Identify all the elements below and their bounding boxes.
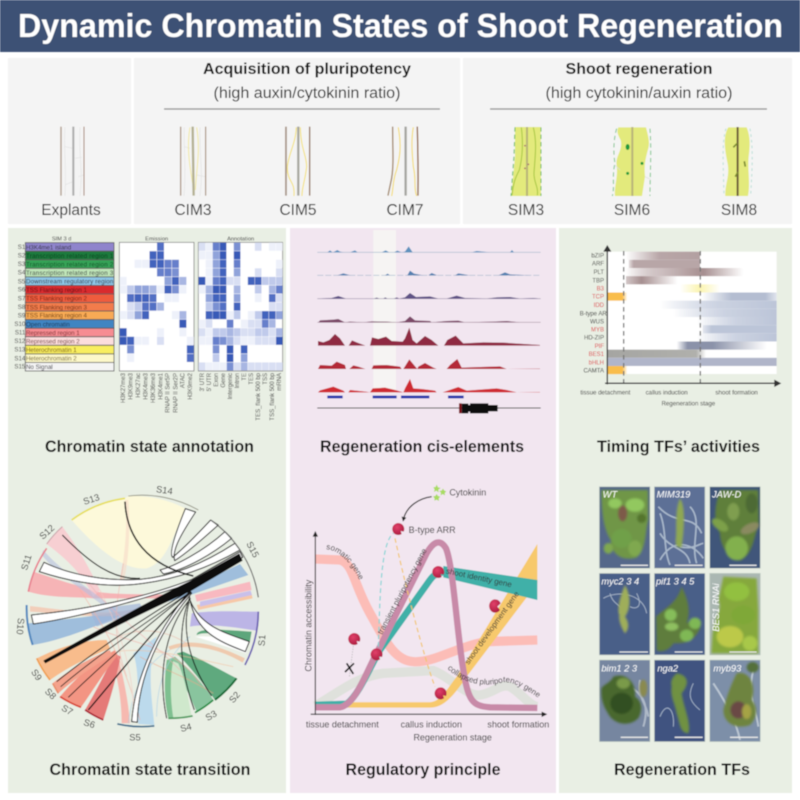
heatmap: annotation: TE	[242, 373, 248, 381]
labels: transcription factors: B-type AR	[580, 311, 607, 317]
labels: transcription factors: B3	[597, 287, 605, 293]
heading: regeneration cis-elements: Regeneration cis-elements	[320, 437, 524, 456]
photo: JAW-D	[710, 487, 761, 568]
chart: regeneration cis-element tracks	[317, 230, 541, 413]
photo: myb93	[710, 660, 760, 742]
labels: state sectors: S15	[244, 540, 261, 559]
labels: state sectors: S5	[129, 732, 141, 742]
heading: chromatin state annotation: Chromatin state annotation	[45, 437, 254, 456]
heatmap: annotation: Gene	[221, 372, 227, 388]
legend: chromatin states: Transcription related region 1	[26, 253, 114, 260]
heatmap: emission: H3K36me3	[151, 372, 157, 403]
curve: shoot development gene	[315, 544, 537, 708]
photo: BES1 RNAi	[710, 573, 760, 655]
heatmap: emission: H3K9me2	[188, 372, 194, 400]
legend: chromatin states: Heterochromatin 2	[26, 356, 77, 363]
heatmap: annotation: 3' UTR	[200, 372, 206, 391]
ribbons: S15 transitions outlined in black	[31, 502, 249, 722]
title banner: Dynamic Chromatin States of Shoot Regeneration	[18, 8, 783, 45]
heatmap: emission	[119, 237, 194, 413]
heatmap: emission: H3K9me3	[128, 372, 134, 400]
legend: chromatin states: S3	[18, 261, 26, 268]
photo: bim1 2 3	[599, 660, 650, 742]
heading: regeneration TFs: Regeneration TFs	[614, 760, 750, 779]
labels: state sectors: S12	[37, 523, 57, 541]
heatmap: annotation: mRNA	[277, 373, 283, 391]
photo: BES1 RNAi: BES1 RNAi	[711, 583, 721, 632]
heatmap: annotation: Intron	[235, 373, 241, 388]
labels: regeneration stages	[580, 389, 758, 407]
panel: regeneration cis-elements and regulatory principle	[290, 228, 556, 793]
labels: regulatory principle: shoot formation	[487, 719, 549, 729]
icon: cytokinin molecules	[433, 485, 446, 501]
subheading: auxin ratio: (high auxin/cytokinin ratio)	[214, 85, 400, 102]
labels: regeneration stages: callus induction	[646, 389, 688, 396]
legend: chromatin states: S8	[18, 304, 26, 311]
legend: chromatin states: Transcription related region 2	[26, 261, 114, 268]
chart: timing of TF activities	[580, 245, 781, 407]
heatmap: annotation: Exon	[214, 373, 220, 387]
heatmap: annotation: TSS	[263, 373, 269, 385]
chart: regulatory principle	[304, 484, 550, 743]
legend: chromatin states: S7	[18, 295, 26, 302]
icon: CIM7 tissue	[388, 127, 418, 196]
labels: transcription factors: ARF	[592, 262, 604, 268]
panel: explants	[8, 58, 131, 224]
label: CIM3: CIM3	[174, 202, 212, 219]
legend: chromatin states: Repressed region 2	[26, 338, 80, 345]
heatmap: annotation: Annotation	[227, 237, 254, 243]
axes	[311, 531, 547, 717]
icon: explant tissue	[61, 127, 84, 196]
title banner	[0, 0, 800, 52]
photo: myb93: myb93	[713, 664, 742, 674]
labels: regulatory principle	[304, 488, 550, 743]
gene model	[317, 403, 541, 413]
legend: chromatin states: S15	[14, 364, 26, 371]
label: CIM7: CIM7	[386, 202, 424, 219]
labels: regulatory principle: shoot development gene	[463, 589, 521, 666]
legend: chromatin states: Transcription related region 3	[26, 270, 114, 277]
labels: regulatory principle: collapsed pluripotency gene	[448, 666, 540, 698]
axes	[603, 245, 781, 387]
ring: sector arcs	[27, 495, 258, 727]
icon: SIM8 tissue	[723, 127, 752, 196]
labels: regulatory principle: shoot identity gene	[445, 566, 513, 589]
legend: chromatin states: S2	[18, 253, 26, 260]
labels: transcription factors: PIF	[595, 344, 604, 350]
labels: transcription factors: HD-ZIP	[584, 336, 604, 342]
heatmap: emission: H3K27ac	[136, 373, 142, 398]
chart: chromatin state annotation	[14, 237, 283, 421]
labels: transcription factors: PLT	[593, 270, 604, 276]
photo: nga2	[654, 660, 705, 742]
photo grid: regeneration TFs	[599, 487, 761, 742]
heatmap: emission: Emission	[145, 237, 168, 243]
heading: shoot regeneration: Shoot regeneration	[566, 61, 712, 78]
heading: timing TFs' activities: Timing TFs’ activities	[597, 437, 760, 456]
legend: chromatin states: Open chromatin	[26, 321, 70, 328]
labels: transcription factors: BES1	[589, 352, 605, 358]
heading: acquisition of pluripotency: Acquisition of pluripotency	[203, 61, 411, 78]
curve: collapsed pluripotency gene	[315, 671, 537, 707]
labels: state sectors: S11	[19, 553, 34, 572]
labels: regeneration stages: tissue detachment	[580, 389, 631, 396]
heatmap: emission: RNAP II Ser2P	[173, 373, 179, 413]
photo: JAW-D: JAW-D	[711, 490, 741, 500]
photo: nga2: nga2	[657, 664, 679, 674]
photo: WT: WT	[603, 490, 618, 500]
ribbons: coloured state transitions	[28, 496, 258, 725]
photo: WT	[599, 487, 650, 568]
label: explants: Explants	[41, 202, 101, 219]
legend: chromatin states: S6	[18, 287, 26, 294]
legend: chromatin states: S14	[14, 355, 26, 362]
labels: transcription factors: IDD	[594, 303, 605, 309]
curve: transient pluripotency gene	[315, 542, 537, 708]
legend: chromatin states: TSS Flanking region 3	[26, 304, 87, 311]
heatmap: annotation: TES	[249, 373, 255, 385]
panel: shoot regeneration	[463, 58, 792, 224]
labels: state sectors: S13	[82, 492, 101, 507]
bars: cis-element regions	[327, 396, 464, 398]
subheading: cytokinin ratio: (high cytokinin/auxin ratio)	[546, 85, 732, 102]
heatmap: annotation: TES_flank 500 bp	[256, 372, 262, 421]
labels: state sectors: S6	[82, 717, 96, 730]
labels: regulatory principle: Regeneration stage	[413, 733, 492, 743]
heatmap: emission: H3K27me3	[121, 372, 127, 403]
labels: state sectors: S1	[257, 634, 267, 647]
labels: regeneration stages: Regeneration stage	[661, 400, 716, 407]
photo: MIM319: MIM319	[657, 490, 690, 500]
curve: shoot identity gene	[315, 566, 537, 705]
labels: regulatory principle: somatic gene	[326, 544, 363, 580]
labels: state sectors: S3	[204, 709, 219, 723]
heatmap: annotation: Intergenic	[228, 373, 234, 399]
photo: bim1 2 3: bim1 2 3	[601, 664, 638, 674]
legend: chromatin states: Downstream regulatory region	[26, 279, 114, 286]
labels: state sectors: S10	[15, 618, 26, 635]
icon: ARR protein balls	[348, 523, 501, 699]
labels: transcription factors: WUS	[590, 319, 604, 325]
lines: stage boundaries	[624, 251, 700, 387]
labels: transcription factors: TBP	[592, 278, 604, 284]
tracks: low accessibility	[317, 246, 541, 322]
labels: regulatory principle: tissue detachment	[306, 719, 379, 729]
icon: blocked binding	[345, 646, 354, 677]
legend: chromatin states: TSS Flanking region 2	[26, 296, 87, 303]
heading: regulatory principle: Regulatory principle	[346, 760, 500, 779]
bars: TF activity windows	[607, 252, 777, 374]
labels: state sectors	[15, 484, 267, 742]
labels: regulatory principle: Chromatin accessibility	[304, 579, 314, 672]
label: SIM8: SIM8	[721, 202, 757, 219]
heatmap: annotation: TSS_flank 500 bp	[270, 372, 276, 421]
labels: regulatory principle: transient pluripotency gene	[376, 547, 429, 636]
photo: MIM319	[654, 487, 705, 568]
labels: state sectors: S8	[43, 686, 58, 701]
labels: transcription factors: bHLH	[589, 360, 604, 366]
legend: chromatin states: S4	[18, 270, 26, 277]
curve: somatic gene	[315, 559, 537, 662]
icon: CIM3 tissue	[181, 127, 206, 196]
legend: chromatin states: S10	[14, 321, 26, 328]
legend: chromatin states: H3K4me1 island	[26, 244, 72, 251]
icon: CIM5 tissue	[286, 127, 310, 196]
heatmap: emission: ATAC	[181, 372, 187, 388]
heatmap: emission: H3K4me1	[158, 372, 164, 400]
labels: state sectors: S14	[155, 484, 173, 496]
labels: transcription factors: MYB	[591, 328, 604, 334]
labels: state sectors: S9	[29, 667, 44, 682]
labels: regulatory principle: callus induction	[401, 719, 462, 729]
legend: chromatin states: S13	[14, 347, 26, 354]
dashed links from B-type ARR	[378, 533, 435, 687]
labels: transcription factors: CAMTA	[583, 368, 604, 374]
label: CIM5: CIM5	[279, 202, 317, 219]
labels: state sectors: S2	[227, 690, 242, 705]
legend: chromatin states	[14, 237, 114, 371]
photo: pif1 3 4 5: pif1 3 4 5	[655, 576, 695, 586]
arrow: cytokinin to ARR	[402, 497, 432, 522]
labels: state sectors: S7	[60, 703, 75, 717]
labels: transcription factors: bZIP	[591, 254, 604, 260]
legend: chromatin states: No Signal	[26, 364, 53, 371]
legend: chromatin states: S12	[14, 338, 26, 345]
label: SIM3: SIM3	[508, 202, 544, 219]
legend: chromatin states: SIM 3 d	[52, 237, 71, 243]
legend: chromatin states: S11	[15, 330, 26, 337]
legend: chromatin states: Repressed region 1	[26, 330, 80, 337]
legend: chromatin states: S9	[18, 312, 26, 319]
chart: chromatin state transition chord diagram	[15, 484, 267, 742]
legend: chromatin states: TSS Flanking region 4	[26, 313, 87, 320]
ribbon: dense black bundle	[43, 553, 243, 663]
labels: regulatory principle: B-type ARR	[409, 525, 456, 535]
labels: state sectors: S4	[179, 721, 193, 734]
labels: transcription factors: TCP	[592, 295, 604, 301]
labels: regeneration stages: shoot formation	[715, 389, 758, 396]
heatmap: annotation	[198, 237, 283, 421]
legend: chromatin states: Heterochromatin 1	[26, 347, 77, 354]
photo: myc2 3 4: myc2 3 4	[601, 576, 639, 586]
labels: transcription factors	[580, 254, 607, 374]
heading: chromatin state transition: Chromatin state transition	[50, 760, 250, 779]
legend: chromatin states: TSS Flanking region 1	[26, 287, 87, 294]
panel: timing TFs and regeneration TFs	[559, 228, 792, 793]
heatmap: emission: H3K4me3	[143, 372, 149, 400]
panel: acquisition of pluripotency	[134, 58, 460, 224]
photo: pif1 3 4 5	[654, 573, 705, 655]
icon: SIM6 tissue	[612, 127, 651, 196]
tracks: high accessibility	[318, 328, 540, 392]
legend: chromatin states: S1	[18, 244, 26, 251]
photo: myc2 3 4	[599, 573, 650, 655]
heatmap: emission: RNAP II Ser5P	[166, 373, 172, 413]
legend: chromatin states: S5	[18, 278, 26, 285]
icon: SIM3 tissue	[511, 127, 541, 196]
panel: chromatin state annotation and transition	[8, 228, 286, 793]
labels: regulatory principle: Cytokinin	[449, 488, 486, 498]
heatmap: annotation: 5' UTR	[207, 372, 213, 391]
label: SIM6: SIM6	[614, 202, 650, 219]
